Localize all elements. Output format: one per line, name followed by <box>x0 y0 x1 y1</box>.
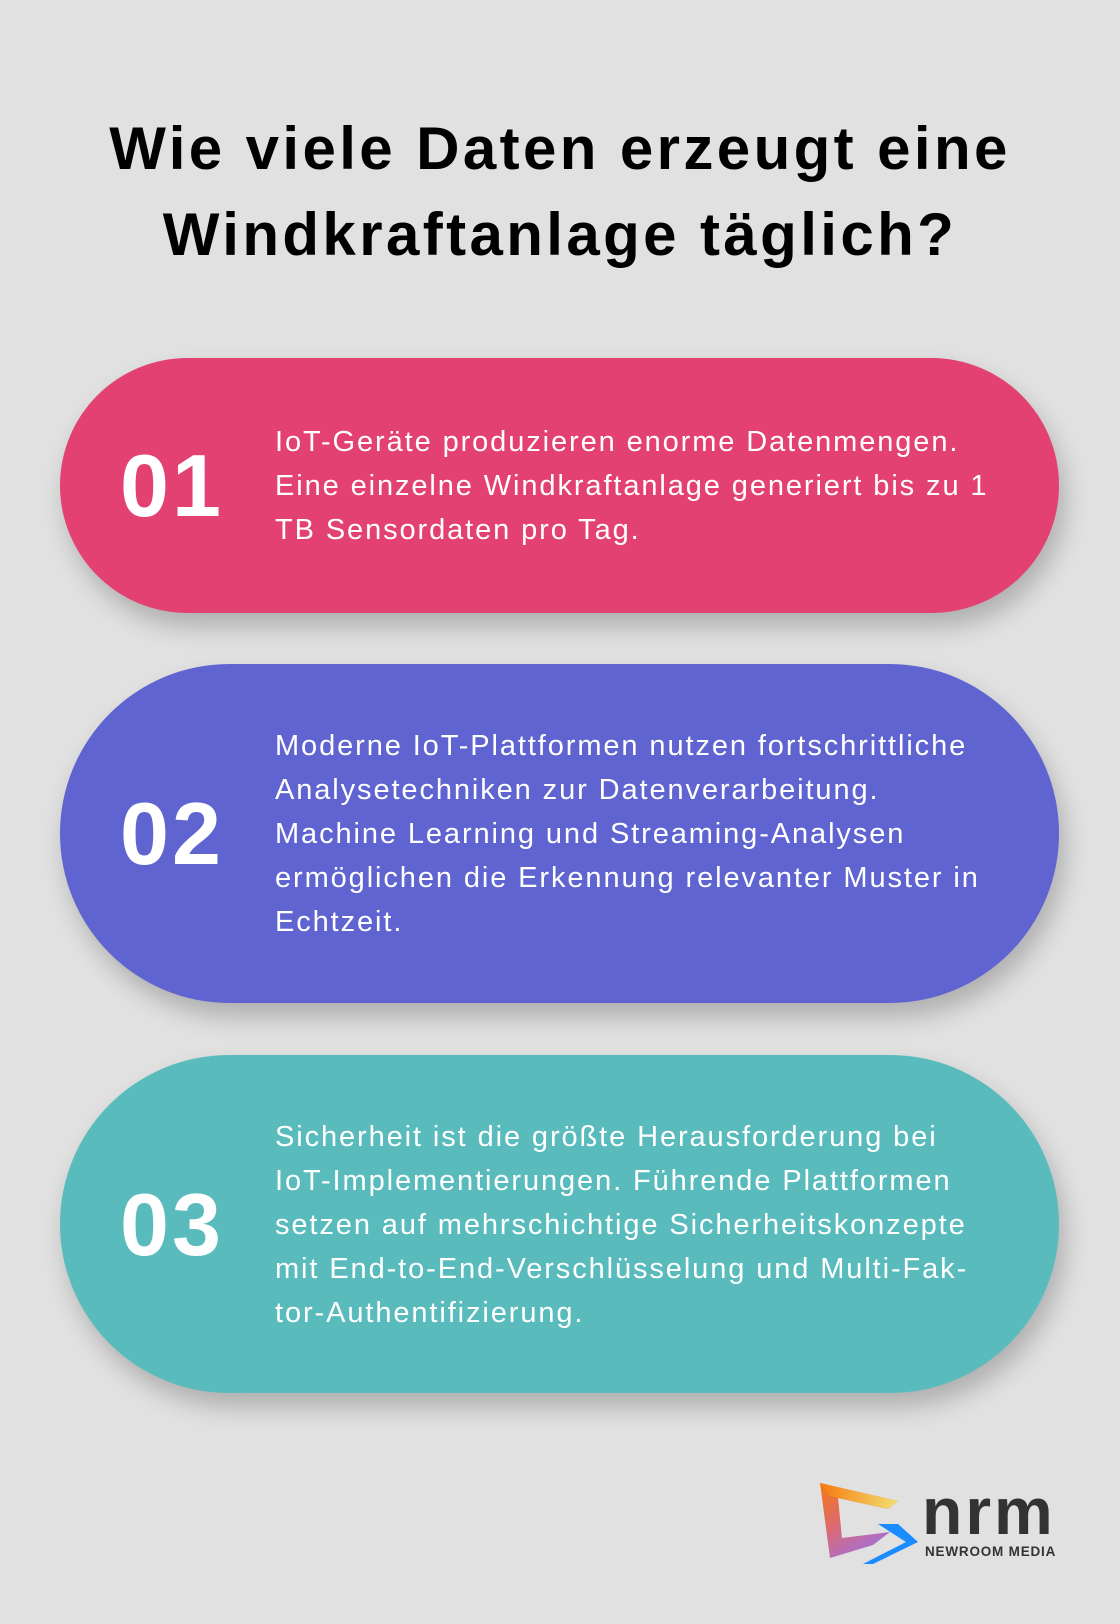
title: Wie viele Daten erzeugt eine <box>109 115 1011 182</box>
text 02 <box>275 730 980 938</box>
title: Windkraftanlage täglich? <box>163 201 957 268</box>
text 02: Machine Learning und Streaming-Analysen <box>275 818 905 850</box>
text 01 <box>275 426 988 546</box>
logo: NEWROOM MEDIA <box>925 1544 1056 1559</box>
text 03: tor-Authentifizierung. <box>275 1297 584 1329</box>
panel: 01 <box>60 358 1059 613</box>
text 03: setzen auf mehrschichtige Sicherheitskonzepte <box>275 1209 967 1241</box>
panel: 03 <box>60 1055 1059 1393</box>
text 03: IoT-Implementierungen. Führende Plattformen <box>275 1165 952 1197</box>
text 02: ermöglichen die Erkennung relevanter Muster in <box>275 862 980 894</box>
text 03: Sicherheit ist die größte Herausforderung bei <box>275 1121 938 1153</box>
text 01: IoT-Geräte produzieren enorme Datenmengen. <box>275 426 959 458</box>
text 03: mit End-to-End-Verschlüsselung und Multi-Fak- <box>275 1253 968 1285</box>
number 02: 02 <box>120 784 224 883</box>
text 02: Analysetechniken zur Datenverarbeitung. <box>275 774 879 806</box>
text 01: TB Sensordaten pro Tag. <box>275 514 641 546</box>
text 01: Eine einzelne Windkraftanlage generiert bis zu 1 <box>275 470 988 502</box>
panel: 02 <box>60 664 1059 1003</box>
text 02: Echtzeit. <box>275 906 403 938</box>
icon: logo mark <box>820 1483 918 1564</box>
logo text: nrm <box>922 1474 1056 1548</box>
number 01: 01 <box>120 436 224 535</box>
text 02: Moderne IoT-Plattformen nutzen fortschrittliche <box>275 730 967 762</box>
title <box>109 115 1011 268</box>
text 03 <box>275 1121 968 1329</box>
logo <box>820 1474 1056 1564</box>
number 03: 03 <box>120 1175 224 1274</box>
